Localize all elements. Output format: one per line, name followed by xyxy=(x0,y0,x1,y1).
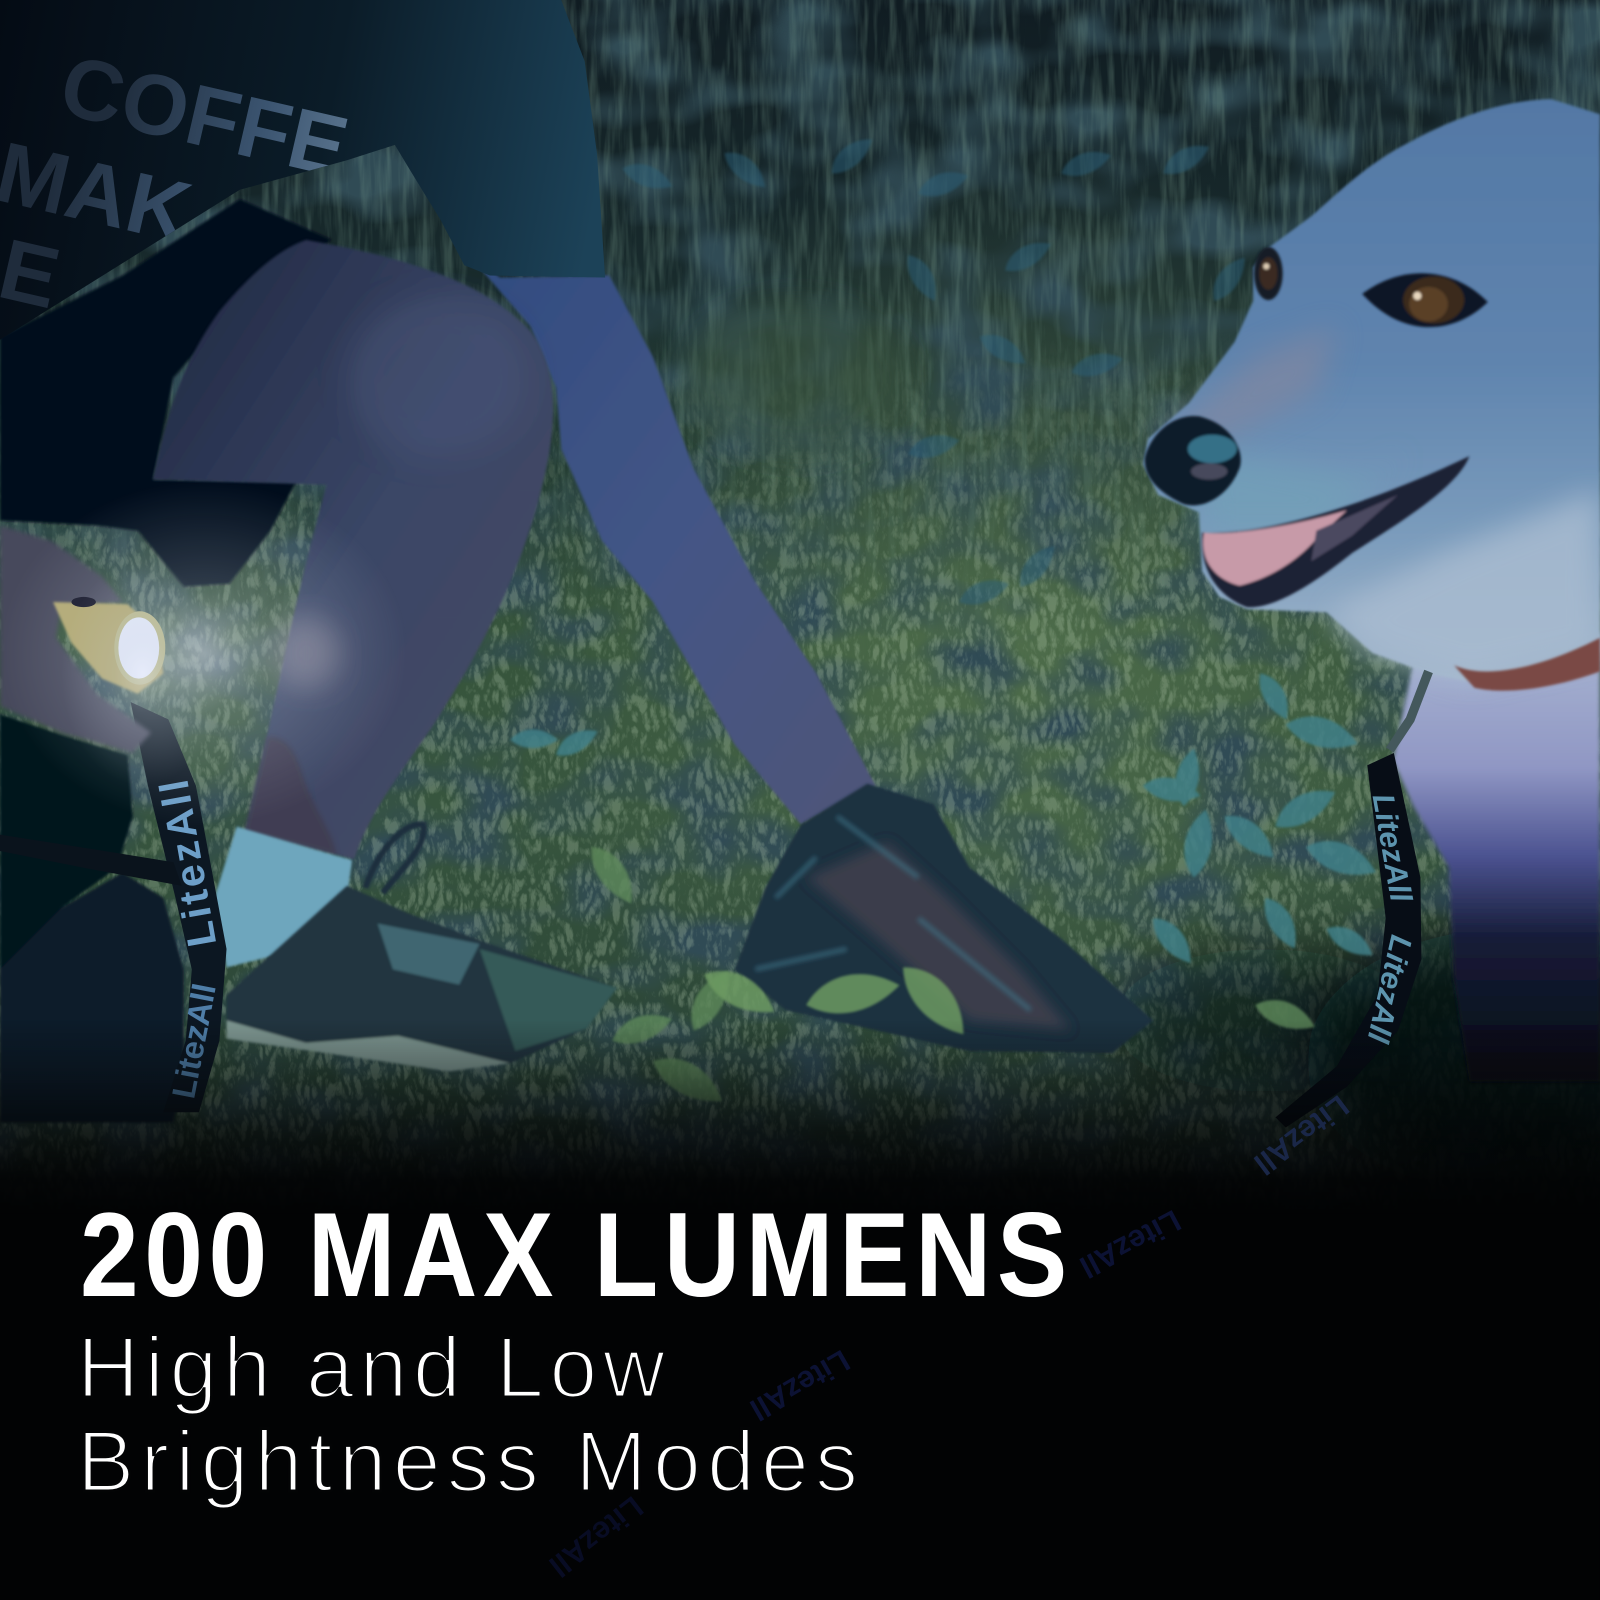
dog head xyxy=(1143,99,1600,682)
heading: 200 MAX LUMENS xyxy=(80,1188,1067,1321)
dog collar xyxy=(1454,638,1600,691)
grass background xyxy=(0,0,1600,1172)
subheading: Brightness Modes xyxy=(77,1414,858,1510)
faint leash trailing through dark xyxy=(543,1088,1355,1583)
blue flowers in background xyxy=(619,131,1252,611)
leash with logo: LitezAll xyxy=(1366,791,1418,906)
subheading xyxy=(77,1320,858,1510)
dog muzzle shading xyxy=(1153,327,1337,449)
dog xyxy=(1143,99,1600,1082)
dog eyes xyxy=(1254,247,1488,327)
leash with logo xyxy=(1276,753,1421,1128)
front plant over bag xyxy=(698,954,978,1045)
black fade at bottom xyxy=(0,1020,1600,1214)
shirt print xyxy=(0,60,348,308)
leash clip xyxy=(1390,671,1429,750)
strap with logo xyxy=(0,702,227,1112)
person: shorts xyxy=(0,199,332,1122)
person: running shoe xyxy=(227,824,617,1071)
faint leash trailing through dark: LitezAll xyxy=(1248,1088,1355,1181)
faint leash trailing through dark: LitezAll xyxy=(744,1343,855,1427)
person: sock xyxy=(214,827,352,967)
flashlight xyxy=(0,480,408,827)
shirt print: COFFE xyxy=(52,37,356,196)
hand xyxy=(0,526,151,753)
leash with logo: LitezAll xyxy=(1360,932,1418,1047)
waste bag xyxy=(735,784,1153,1053)
dog mouth xyxy=(1202,456,1469,607)
strap with logo: LitezAll xyxy=(164,980,223,1101)
strap with logo: LitezAll xyxy=(151,776,225,950)
dog chest xyxy=(1393,633,1600,1082)
person: leg and knee xyxy=(153,240,553,859)
faint leash trailing through dark: LitezAll xyxy=(1074,1203,1186,1284)
dog nose xyxy=(1145,416,1241,505)
faint leash trailing through dark: LitezAll xyxy=(543,1489,649,1583)
shirt xyxy=(0,0,605,340)
dog white ruff xyxy=(1327,490,1600,682)
foreground plants xyxy=(301,668,1381,1113)
person: arm reaching to the ground xyxy=(464,250,876,824)
subheading: High and Low xyxy=(77,1320,666,1416)
